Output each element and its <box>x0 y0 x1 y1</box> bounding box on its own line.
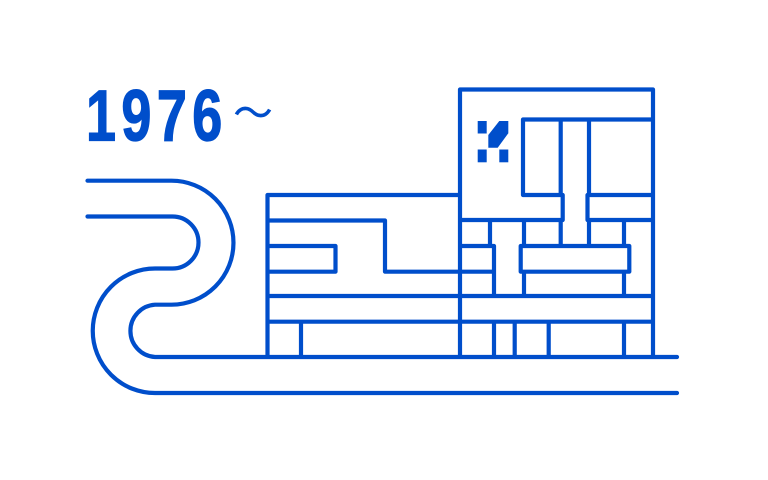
icon: company logo <box>478 121 508 162</box>
building: tall right tower <box>460 90 653 357</box>
title: year 1976: 1976 <box>86 76 228 156</box>
building: low left wing <box>268 195 460 357</box>
road: winding double line <box>88 181 677 393</box>
title: tilde mark: 〜 <box>234 93 273 136</box>
